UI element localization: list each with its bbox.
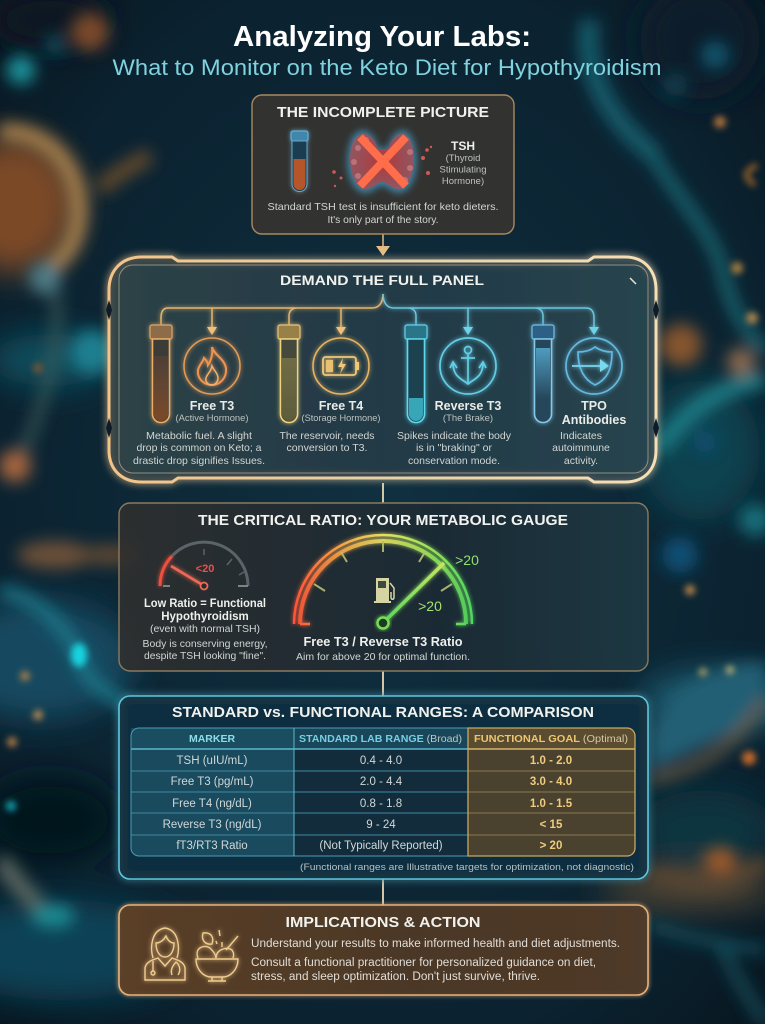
connector tree: [161, 294, 599, 335]
title: Analyzing Your Labs:: [233, 21, 531, 53]
table header: MARKER: [189, 733, 235, 745]
text block: implications: [251, 938, 620, 983]
table rows: 0.4 - 4.0: [360, 755, 402, 767]
small gauge: <20: [196, 563, 214, 575]
table header: [189, 733, 628, 745]
label: reverse T3: Reverse T3: [435, 399, 501, 413]
text block: free T4: conversion to T3.: [286, 442, 368, 454]
small gauge: [160, 542, 248, 590]
label: free T3: [176, 399, 248, 424]
text block: TPO: Indicates: [560, 430, 602, 442]
label: TPO antibodies: Antibodies: [562, 413, 626, 427]
title: [112, 21, 662, 80]
panel: implications and action: [119, 905, 648, 995]
icon: circle shield: [566, 338, 622, 394]
text block: free T3: drastic drop signifies Issues.: [133, 455, 265, 467]
text block: free T4: The reservoir, needs: [280, 430, 374, 442]
text block: free T3: drop is common on Keto; a: [136, 442, 262, 454]
large gauge: >20: [455, 552, 479, 568]
text block: low ratio: Hypothyroidism: [161, 611, 249, 623]
label: reverse T3: (The Brake): [443, 413, 493, 424]
table rows: [163, 755, 573, 852]
table rows: fT3/RT3 Ratio: [176, 840, 248, 852]
text block: reverse T3: Spikes indicate the body: [397, 430, 512, 442]
heading: demand the full panel: DEMAND THE FULL PANEL: [280, 272, 484, 288]
table rows: 1.0 - 1.5: [530, 798, 573, 810]
text block: low ratio: despite TSH looking "fine".: [144, 650, 266, 662]
heading: critical ratio: THE CRITICAL RATIO: YOUR METABOLIC GAUGE: [198, 513, 568, 529]
label: TSH: Hormone): [442, 176, 484, 187]
table rows: 0.8 - 1.8: [360, 798, 402, 810]
label: reverse T3: [435, 399, 501, 424]
table rows: 3.0 - 4.0: [530, 776, 572, 788]
icon: thyroid with red cross: [332, 130, 432, 193]
arrow: incomplete picture to full panel: [376, 234, 390, 256]
text block: TPO: [552, 430, 610, 467]
comparison table: [131, 728, 635, 856]
text block: ratio caption: Aim for above 20 for optimal function.: [296, 651, 470, 663]
table header: FUNCTIONAL GOAL (Optimal): [474, 733, 628, 745]
icon: tube free T4: [278, 325, 300, 422]
icon: circle battery: [313, 338, 369, 394]
table rows: < 15: [540, 819, 563, 831]
table rows: Free T3 (pg/mL): [171, 776, 254, 788]
table header: STANDARD LAB RANGE (Broad): [299, 733, 462, 745]
table rows: 2.0 - 4.4: [360, 776, 403, 788]
text block: incomplete picture: [268, 201, 498, 226]
text block: low ratio: Low Ratio = Functional: [144, 598, 266, 610]
table rows: > 20: [540, 840, 562, 852]
table rows: Free T4 (ng/dL): [172, 798, 252, 810]
large gauge: [294, 535, 479, 628]
large gauge: >20: [418, 598, 442, 614]
panel: standard vs functional ranges: [119, 696, 648, 879]
text block: low ratio: Body is conserving energy,: [142, 638, 268, 650]
label: TSH: (Thyroid: [446, 153, 480, 164]
icon: test tube: [291, 131, 308, 192]
table rows: TSH (uIU/mL): [177, 755, 248, 767]
connectors between lower panels: [382, 483, 384, 905]
icon: tube free T3: [150, 325, 172, 422]
icon: circle anchor: [440, 338, 496, 394]
table rows: 1.0 - 2.0: [530, 755, 572, 767]
table rows: Reverse T3 (ng/dL): [163, 819, 262, 831]
heading: implications: IMPLICATIONS & ACTION: [286, 914, 480, 931]
label: free T4: (Storage Hormone): [302, 413, 380, 424]
text block: free T3: [133, 430, 265, 467]
text block: ratio caption: [296, 634, 470, 663]
text block: incomplete picture: It's only part of the story.: [328, 214, 438, 226]
text block: TPO: activity.: [564, 455, 598, 467]
label: TSH: Stimulating: [440, 164, 486, 176]
text block: TPO: autoimmune: [552, 442, 610, 454]
title: What to Monitor on the Keto Diet for Hypothyroidism: [112, 55, 662, 80]
label: free T3: (Active Hormone): [176, 413, 248, 424]
label: TSH: TSH: [451, 139, 475, 153]
label: TPO antibodies: [562, 399, 626, 427]
text block: reverse T3: [397, 430, 512, 467]
icon: fuel pump: [374, 578, 394, 603]
heading: incomplete picture: THE INCOMPLETE PICTURE: [277, 105, 489, 121]
text block: reverse T3: is in "braking" or: [416, 442, 492, 454]
label: free T4: [302, 399, 380, 424]
icon: doctor: [145, 928, 185, 980]
text block: implications: Consult a functional practitioner for personalized guidance on diet,: [251, 957, 596, 969]
text block: implications: Understand your results to make informed health and diet adjustments.: [251, 938, 620, 950]
panel: demand the full panel: [106, 257, 659, 482]
icon: circle flame: [184, 338, 240, 394]
label: TSH: [440, 139, 486, 187]
text block: implications: stress, and sleep optimization. Don't just survive, thrive.: [251, 971, 540, 983]
text block: low ratio: (even with normal TSH): [150, 623, 260, 635]
table rows: (Not Typically Reported): [319, 840, 443, 852]
label: free T4: Free T4: [319, 399, 363, 413]
table rows: 9 - 24: [366, 819, 396, 831]
text block: incomplete picture: Standard TSH test is insufficient for keto dieters.: [268, 201, 498, 213]
text block: ratio caption: Free T3 / Reverse T3 Ratio: [304, 634, 463, 649]
heading: comparison: STANDARD vs. FUNCTIONAL RANGES: A COMPARISON: [172, 704, 594, 721]
label: free T3: Free T3: [190, 399, 234, 413]
text block: low ratio: [142, 598, 268, 662]
panel: the incomplete picture: [252, 95, 514, 234]
panel: the critical ratio: [119, 503, 648, 671]
label: TPO antibodies: TPO: [581, 399, 607, 413]
text block: free T4: [280, 430, 374, 454]
icon: tube reverse T3: [405, 325, 427, 422]
footnote: (Functional ranges are Illustrative targets for optimization, not diagnostic): [300, 862, 634, 873]
icon: tube TPO: [532, 325, 554, 422]
text block: reverse T3: conservation mode.: [408, 455, 500, 467]
text block: free T3: Metabolic fuel. A slight: [146, 430, 252, 442]
icon: food bowl: [196, 930, 238, 981]
